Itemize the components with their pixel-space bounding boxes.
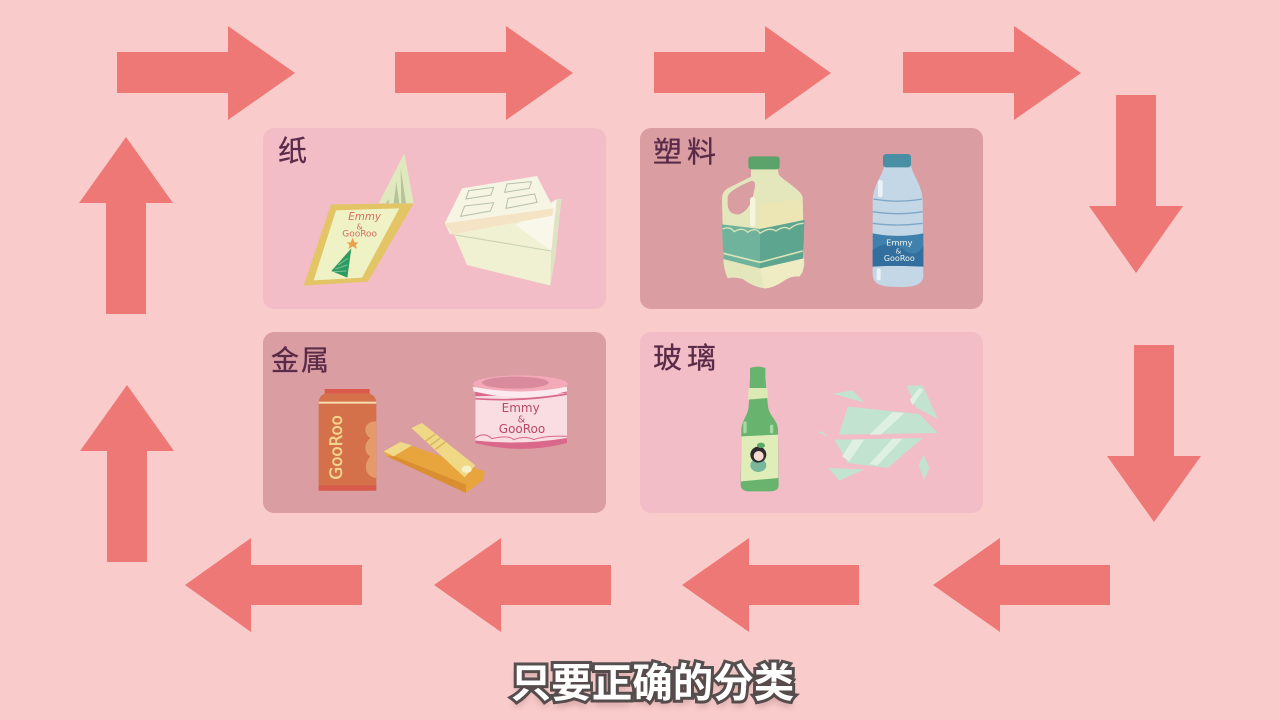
icon: tin can: GooRoo <box>499 422 545 436</box>
icon: greeting card: & <box>357 222 363 231</box>
arrow: left 1 <box>80 385 174 562</box>
icon: green bottle <box>741 367 779 491</box>
icon: foam box <box>445 176 561 286</box>
panel: metal <box>263 332 606 513</box>
panel: plastic <box>640 128 983 309</box>
arrow: bottom 3 <box>434 538 611 632</box>
icon: greeting card <box>304 153 414 286</box>
heading: plastic: 塑料 <box>653 129 721 171</box>
icon: water bottle <box>873 154 923 287</box>
icon: drink can: GooRoo <box>327 415 346 480</box>
panel: glass <box>640 332 983 513</box>
arrow: bottom 1 <box>933 538 1110 632</box>
icon: nail clipper <box>384 423 485 493</box>
icon: broken glass <box>818 385 938 481</box>
arrow: left 2 <box>79 137 173 314</box>
subtitle: 只要正确的分类 <box>511 650 794 709</box>
heading: metal: 金属 <box>271 339 331 379</box>
icon: plastic jug <box>722 156 804 288</box>
icon: tin can: Emmy <box>502 401 540 415</box>
heading: paper: 纸 <box>278 128 307 170</box>
icon: water bottle: GooRoo <box>884 254 915 263</box>
icon: tin can: & <box>518 415 526 426</box>
icon: greeting card: Emmy <box>348 211 382 223</box>
icon: greeting card: GooRoo <box>342 230 377 240</box>
arrow: bottom 4 <box>185 538 362 632</box>
arrow: bottom 2 <box>682 538 859 632</box>
arrows: recycling loop <box>79 26 1201 632</box>
icon: drink can <box>319 389 376 491</box>
arrow: right 1 <box>1089 95 1183 273</box>
arrow: top 1 <box>117 26 295 120</box>
panel: paper <box>263 128 606 309</box>
arrow: top 4 <box>903 26 1081 120</box>
icon: tin can <box>473 375 568 449</box>
heading: glass: 玻璃 <box>653 335 721 377</box>
arrow: top 2 <box>395 26 573 120</box>
icon: water bottle: Emmy <box>886 238 913 248</box>
arrow: top 3 <box>654 26 831 120</box>
arrow: right 2 <box>1107 345 1201 522</box>
icon: water bottle: & <box>895 246 901 255</box>
